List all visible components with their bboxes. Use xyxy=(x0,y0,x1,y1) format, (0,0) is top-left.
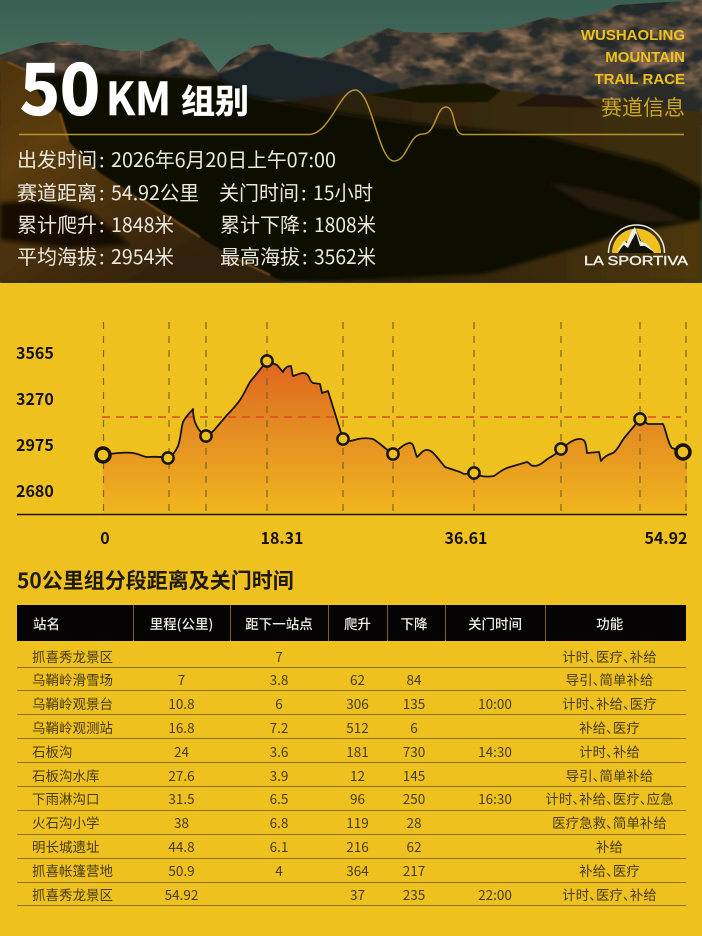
row: finish: 抓喜秀龙景区 xyxy=(32,884,113,904)
row: start: 7 xyxy=(275,646,283,666)
elevation line decoration xyxy=(19,90,684,161)
race facts xyxy=(17,144,376,270)
row: station 4: 6 xyxy=(410,717,418,737)
race facts: : xyxy=(99,209,105,238)
row: station 4: 7.2 xyxy=(270,717,288,737)
row: station 7: 下雨淋沟口 xyxy=(32,788,100,808)
race facts: : xyxy=(302,209,308,238)
row: station 4: 16.8 xyxy=(168,717,195,737)
hero banner: photo background with race info xyxy=(0,0,702,283)
distance axis labels: 36.61 xyxy=(445,525,487,549)
row: station 6: 导引、简单补给 xyxy=(566,764,653,784)
race facts: 出发时间 xyxy=(17,144,97,173)
row: finish: 54.92 xyxy=(165,884,198,904)
row: station 9: 补给 xyxy=(596,836,623,856)
race facts: 2026年6月20日上午07:00 xyxy=(111,144,336,173)
elevation axis labels: 2975 xyxy=(16,432,54,456)
distance axis labels: 18.31 xyxy=(261,525,303,549)
race facts: 3562米 xyxy=(314,241,376,270)
race facts: 1808米 xyxy=(314,209,376,238)
sky xyxy=(0,0,702,283)
distance axis labels: 54.92 xyxy=(645,525,687,549)
title: 50KM 组别: 50 xyxy=(20,34,100,134)
row: start: 抓喜秀龙景区 xyxy=(32,646,113,666)
subtitle: 赛道信息: 赛道信息 xyxy=(601,92,685,122)
row: station 4: 补给、医疗 xyxy=(579,717,640,737)
row: station 6: 石板沟水库 xyxy=(32,764,100,784)
row: finish: 37 xyxy=(350,884,365,904)
dark hilltop xyxy=(370,83,501,103)
race facts: 累计爬升 xyxy=(17,209,97,238)
race facts: : xyxy=(302,241,308,270)
row: station 7: 16:30 xyxy=(478,788,512,808)
row: station 10: 4 xyxy=(275,860,283,880)
row: station 6 xyxy=(32,764,653,784)
elevation profile chart xyxy=(16,322,692,549)
section heading: 50公里组分段距离及关门时间 xyxy=(17,565,294,595)
row: station 3: 乌鞘岭观景台 xyxy=(32,693,113,713)
race facts: 最高海拔 xyxy=(220,241,300,270)
logo: La Sportiva xyxy=(584,225,688,268)
row: station 9: 6.1 xyxy=(270,836,288,856)
row: finish: 计时、医疗、补给 xyxy=(562,884,657,904)
row: station 5 xyxy=(32,741,640,761)
row: station 4 xyxy=(32,717,640,737)
row: station 8 xyxy=(32,812,667,832)
row: finish: 22:00 xyxy=(478,884,512,904)
elevation axis labels: 3270 xyxy=(16,386,54,410)
dark shaded mountain xyxy=(218,51,420,100)
row: station 8: 119 xyxy=(346,812,369,832)
sunlit ridge xyxy=(8,62,270,275)
row: station 2: 62 xyxy=(350,669,365,689)
race name: TRAIL RACE xyxy=(594,71,685,88)
race facts: : xyxy=(301,177,307,206)
row: station 8: 6.8 xyxy=(270,812,288,832)
vertical station guides xyxy=(104,322,686,514)
race facts: 关门时间 xyxy=(219,177,299,206)
lit hill patch xyxy=(548,183,690,222)
row: station 8: 28 xyxy=(406,812,422,832)
row: station 6: 3.9 xyxy=(270,764,288,784)
row: station 3: 计时、补给、医疗 xyxy=(562,693,657,713)
race facts: 15小时 xyxy=(313,177,373,206)
left slope xyxy=(0,58,283,282)
row: start xyxy=(32,646,657,666)
title: 50KM 组别: KM xyxy=(106,63,171,128)
race name: WUSHAOLING xyxy=(581,27,685,44)
race name xyxy=(581,27,685,88)
row: station 7 xyxy=(32,788,674,808)
row: station 9: 62 xyxy=(406,836,422,856)
row: station 9: 216 xyxy=(346,836,369,856)
elevation axis labels: 3565 xyxy=(16,340,54,364)
row: station 10: 抓喜帐篷营地 xyxy=(32,860,113,880)
row: station 10: 补给、医疗 xyxy=(579,860,640,880)
race facts: : xyxy=(99,144,105,173)
segment table xyxy=(17,605,686,906)
row: station 10 xyxy=(32,860,640,880)
row: finish: 235 xyxy=(403,884,425,904)
race facts: 54.92公里 xyxy=(111,177,199,206)
row: station 2: 84 xyxy=(406,669,422,689)
table header: 距下一站点 xyxy=(245,613,313,633)
row: start: 计时、医疗、补给 xyxy=(562,646,657,666)
race facts: : xyxy=(99,177,105,206)
row: station 3: 306 xyxy=(346,693,369,713)
row: station 6: 12 xyxy=(350,764,365,784)
row: station 9 xyxy=(32,836,623,856)
row: station 9: 44.8 xyxy=(168,836,195,856)
row: station 2: 乌鞘岭滑雪场 xyxy=(32,669,113,689)
row: station 8: 火石沟小学 xyxy=(32,812,100,832)
title: 50KM 组别 xyxy=(20,34,249,134)
row: station 5: 730 xyxy=(403,741,425,761)
table header: 站名 xyxy=(33,613,60,633)
row: station 7: 250 xyxy=(403,788,425,808)
rolling middle hills xyxy=(270,83,702,200)
row: station 8: 医疗急救、简单补给 xyxy=(552,812,667,832)
title: 50KM 组别: 组别 xyxy=(181,75,249,123)
station markers xyxy=(96,355,690,479)
row: station 3: 135 xyxy=(403,693,425,713)
row: station 6: 145 xyxy=(403,764,425,784)
row: station 3: 10:00 xyxy=(478,693,512,713)
race facts: 平均海拔 xyxy=(17,241,97,270)
row: finish xyxy=(32,884,657,904)
dark foreground valley xyxy=(0,72,702,283)
distant rocky mountains xyxy=(0,0,702,125)
row: station 2: 7 xyxy=(178,669,185,689)
row: station 5: 石板沟 xyxy=(32,741,72,761)
row: station 3 xyxy=(32,693,657,713)
race facts: 1848米 xyxy=(111,209,174,238)
baseline xyxy=(17,514,687,516)
row: station 5: 14:30 xyxy=(478,741,512,761)
row: station 10: 50.9 xyxy=(168,860,195,880)
elevation axis labels xyxy=(16,340,54,502)
row: station 3: 6 xyxy=(275,693,283,713)
row: station 6: 27.6 xyxy=(168,764,195,784)
race facts: : xyxy=(99,241,105,270)
shadow band on left slope xyxy=(0,200,130,248)
row: station 8: 38 xyxy=(174,812,189,832)
table header: 里程(公里) xyxy=(150,613,213,633)
row: station 5: 181 xyxy=(346,741,369,761)
table header: 下降 xyxy=(400,613,428,633)
row: station 5: 计时、补给 xyxy=(579,741,640,761)
row: station 2: 3.8 xyxy=(270,669,288,689)
row: station 7: 计时、补给、医疗、应急 xyxy=(545,788,674,808)
row: station 9: 明长城遗址 xyxy=(32,836,100,856)
row: station 4: 512 xyxy=(346,717,369,737)
dark foot of right range xyxy=(620,80,702,125)
row: station 10: 217 xyxy=(403,860,425,880)
logo: La Sportiva: LA SPORTIVA xyxy=(584,253,688,268)
race facts: 累计下降 xyxy=(220,209,300,238)
profile line xyxy=(103,361,683,477)
race facts: 赛道距离 xyxy=(17,177,97,206)
race facts: 2954米 xyxy=(111,241,174,270)
row: station 7: 6.5 xyxy=(270,788,288,808)
profile area fill xyxy=(103,361,687,514)
lower right hill xyxy=(300,220,702,283)
row: station 2: 导引、简单补给 xyxy=(566,669,653,689)
distance axis labels: 0 xyxy=(100,525,110,549)
cutoff reference line xyxy=(102,416,681,418)
row: station 2 xyxy=(32,669,653,689)
row: station 4: 乌鞘岭观测站 xyxy=(32,717,113,737)
row: station 7: 96 xyxy=(350,788,365,808)
elevation axis labels: 2680 xyxy=(16,478,54,502)
row: station 5: 24 xyxy=(174,741,189,761)
row: station 10: 364 xyxy=(346,860,369,880)
distance axis labels xyxy=(100,525,687,549)
table header: 功能 xyxy=(596,613,623,633)
row: station 7: 31.5 xyxy=(168,788,195,808)
row: station 3: 10.8 xyxy=(168,693,195,713)
table header xyxy=(17,605,686,904)
row: station 5: 3.6 xyxy=(270,741,288,761)
table header: 关门时间 xyxy=(468,613,522,633)
race name: MOUNTAIN xyxy=(605,49,685,66)
table header: 爬升 xyxy=(344,613,371,633)
